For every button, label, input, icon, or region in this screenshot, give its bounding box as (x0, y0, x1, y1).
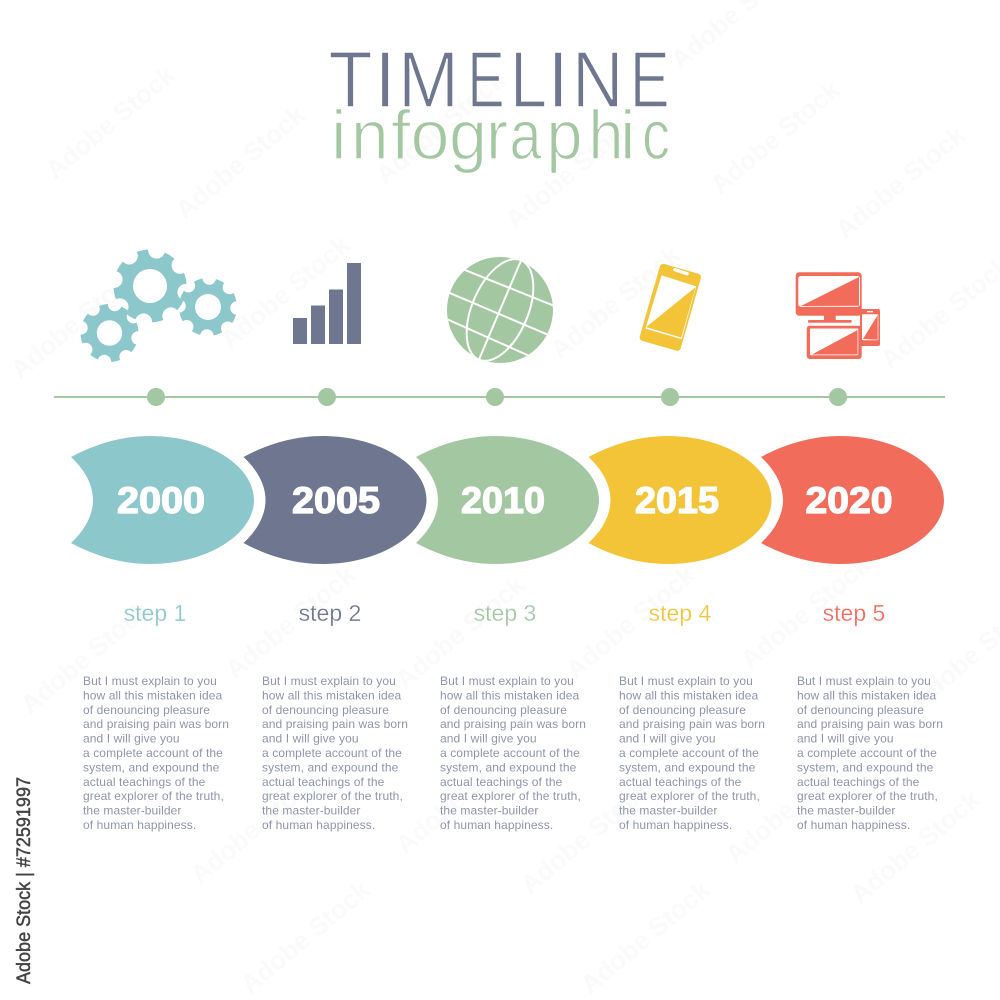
icon: globe (447, 257, 553, 363)
watermark pattern: Adobe Stock (575, 874, 716, 1000)
text block 1: But I must explain to you (83, 674, 217, 688)
watermark pattern: Adobe Stock (390, 569, 531, 695)
text block 5: how all this mistaken idea (797, 688, 937, 702)
text block 4: actual teachings of the (619, 775, 742, 789)
title (328, 35, 670, 174)
text block 5: the master-builder (797, 804, 896, 818)
watermark pattern: Adobe Stock (735, 549, 876, 675)
title: L (510, 35, 547, 124)
text block 5: of human happiness. (797, 818, 910, 832)
watermark pattern: Adobe Stock (235, 874, 376, 1000)
step 4 label: step 4 (649, 600, 712, 626)
timeline axis (54, 388, 945, 406)
text block 3: of denouncing pleasure (440, 703, 567, 717)
text block 3: of human happiness. (440, 818, 553, 832)
text block 4: system, and expound the (619, 760, 756, 774)
watermark pattern: Adobe Stock (830, 119, 971, 245)
watermark pattern: Adobe Stock (845, 784, 986, 910)
text block 4: and I will give you (619, 732, 716, 746)
title: f (391, 96, 411, 174)
watermark pattern: Adobe Stock (705, 74, 846, 200)
text block 5: a complete account of the (797, 746, 937, 760)
title: i (331, 96, 347, 174)
watermark pattern: Adobe Stock (185, 764, 326, 890)
text block 3: system, and expound the (440, 760, 577, 774)
text block 1: and praising pain was born (83, 717, 229, 731)
title: M (398, 35, 459, 124)
title: N (572, 35, 624, 124)
title: E (468, 35, 504, 124)
text block 2: of human happiness. (262, 818, 375, 832)
text block 1: the master-builder (83, 804, 182, 818)
text block 2: of denouncing pleasure (262, 703, 389, 717)
text block 1: of denouncing pleasure (83, 703, 210, 717)
text block 3: the master-builder (440, 804, 539, 818)
watermark pattern: Adobe Stock (370, 64, 511, 190)
watermark pattern: Adobe Stock (215, 229, 356, 355)
title: r (486, 96, 508, 174)
text block 4: But I must explain to you (619, 674, 753, 688)
text block 5: system, and expound the (797, 760, 934, 774)
text block 5: actual teachings of the (797, 775, 920, 789)
step 1 label: step 1 (124, 600, 186, 626)
text block 1: and I will give you (83, 732, 180, 746)
text block 4: great explorer of the truth, (619, 789, 760, 803)
year shape 2005 (244, 436, 426, 564)
text block 5: and I will give you (797, 732, 894, 746)
year shape 2005: 2005 (292, 480, 380, 521)
text block 5: But I must explain to you (797, 674, 931, 688)
text block 2: and I will give you (262, 732, 359, 746)
text block 3: great explorer of the truth, (440, 789, 581, 803)
text block 1: of human happiness. (83, 818, 196, 832)
year shape 2020: 2020 (806, 480, 892, 521)
text block 2: a complete account of the (262, 746, 402, 760)
text block 3: a complete account of the (440, 746, 580, 760)
text block 5: great explorer of the truth, (797, 789, 938, 803)
watermark pattern: Adobe Stock (220, 559, 361, 685)
text block 3: and I will give you (440, 732, 537, 746)
text block 2: system, and expound the (262, 760, 399, 774)
title: E (630, 35, 670, 124)
icon: smartphone (639, 263, 702, 352)
year shape 2020 (761, 436, 944, 564)
watermark pattern: Adobe Stock (15, 594, 156, 720)
year shape 2015: 2015 (635, 480, 719, 521)
text block 4: of denouncing pleasure (619, 703, 746, 717)
title: T (328, 35, 372, 124)
text block 1: actual teachings of the (83, 775, 206, 789)
watermark pattern: Adobe Stock (720, 744, 861, 870)
text block 2: the master-builder (262, 804, 361, 818)
watermark pattern: Adobe Stock (515, 774, 656, 900)
title: I (547, 35, 569, 124)
text block 3: But I must explain to you (440, 674, 574, 688)
title: g (449, 96, 487, 174)
text block 4: the master-builder (619, 804, 718, 818)
text block 4: how all this mistaken idea (619, 688, 759, 702)
text block 2: actual teachings of the (262, 775, 385, 789)
step 2 label: step 2 (299, 600, 361, 626)
text block 1: how all this mistaken idea (83, 688, 223, 702)
stock credit: Adobe Stock | #72591997 (14, 777, 35, 984)
text block 2: But I must explain to you (262, 674, 396, 688)
title: c (642, 96, 670, 174)
text block 1: great explorer of the truth, (83, 789, 224, 803)
title: i (620, 96, 636, 174)
text block 3: and praising pain was born (440, 717, 586, 731)
text block 1: a complete account of the (83, 746, 223, 760)
text block 4: and praising pain was born (619, 717, 765, 731)
year shape 2015 (588, 436, 772, 564)
text block 5: of denouncing pleasure (797, 703, 924, 717)
year shape 2010: 2010 (461, 480, 545, 521)
watermark pattern: Adobe Stock (390, 734, 531, 860)
watermark pattern: Adobe Stock (5, 259, 146, 385)
year shape 2000: 2000 (117, 480, 205, 521)
icon: gears (80, 250, 237, 362)
watermark pattern: Adobe Stock (560, 559, 701, 685)
step 5 label: step 5 (823, 600, 885, 626)
title: n (351, 96, 389, 174)
text block 5: and praising pain was born (797, 717, 943, 731)
year shape 2010 (416, 436, 599, 564)
title: I (374, 35, 396, 124)
text block 4: a complete account of the (619, 746, 759, 760)
watermark pattern: Adobe Stock (545, 239, 686, 365)
title: h (588, 96, 624, 174)
text block 3: actual teachings of the (440, 775, 563, 789)
text block 2: how all this mistaken idea (262, 688, 402, 702)
watermark pattern: Adobe Stock (500, 109, 641, 235)
text block 2: and praising pain was born (262, 717, 408, 731)
text block 3: how all this mistaken idea (440, 688, 580, 702)
title: a (510, 96, 542, 174)
watermark pattern: Adobe Stock (170, 99, 311, 225)
title: o (410, 96, 449, 174)
watermark pattern: Adobe Stock (40, 59, 181, 185)
year shape 2000 (71, 436, 254, 564)
icon: bar chart (293, 263, 361, 344)
text block 2: great explorer of the truth, (262, 789, 403, 803)
text block 1: system, and expound the (83, 760, 220, 774)
text block 4: of human happiness. (619, 818, 732, 832)
title: p (546, 96, 582, 174)
step 3 label: step 3 (474, 600, 536, 626)
icon: devices (796, 272, 880, 359)
